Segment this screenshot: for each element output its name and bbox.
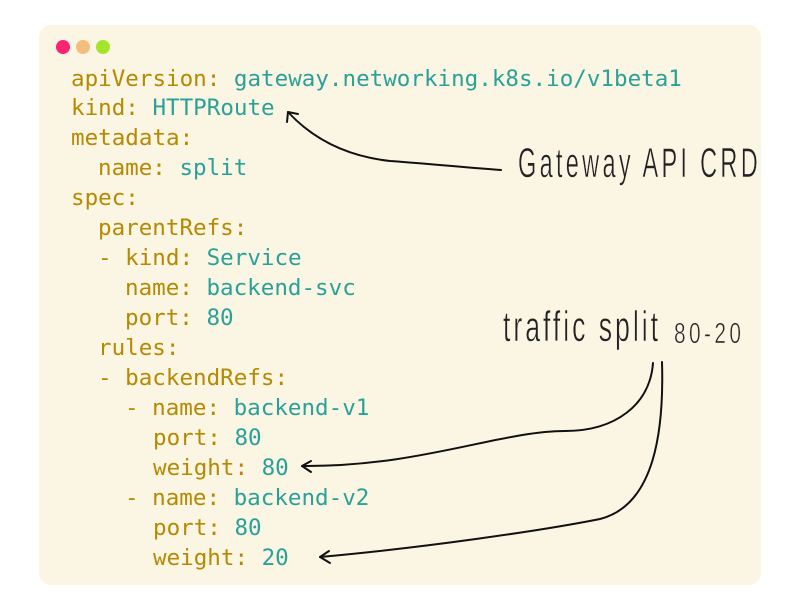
code block: HTTPRoute YAML: spec: [71,185,139,211]
annotation: traffic split 80-20: traffic split [503,303,658,351]
code block: HTTPRoute YAML: rules: [98,335,179,361]
code block: HTTPRoute YAML: port: 80 [125,305,234,331]
code block: HTTPRoute YAML: name: backend-svc [125,275,356,301]
icon: window control dots [56,40,110,54]
code block: HTTPRoute YAML: name: split [98,155,247,181]
arrow: Gateway API CRD to kind [287,112,501,170]
arrow: traffic split to weight 80 [302,363,653,472]
code block: HTTPRoute YAML: - kind: Service [98,245,302,271]
code block: HTTPRoute YAML: - backendRefs: [98,365,288,391]
annotation: traffic split 80-20 [503,303,741,351]
code block: HTTPRoute YAML: kind: HTTPRoute [71,95,275,121]
annotation: traffic split 80-20: 80-20 [674,318,741,350]
code block: HTTPRoute YAML: port: 80 [153,515,262,541]
code block: HTTPRoute YAML: - name: backend-v1 [125,395,369,421]
annotation: Gateway API CRD: Gateway API CRD [518,140,758,187]
code block: HTTPRoute YAML: metadata: [71,125,193,151]
code block: HTTPRoute YAML: port: 80 [153,425,262,451]
code block: HTTPRoute YAML: weight: 80 [153,455,289,481]
code block: HTTPRoute YAML: weight: 20 [153,545,289,571]
code block: HTTPRoute YAML: parentRefs: [98,215,247,241]
code block: HTTPRoute YAML [71,66,682,571]
arrow: traffic split to weight 20 [320,362,662,563]
code block: HTTPRoute YAML: - name: backend-v2 [125,485,369,511]
code block: HTTPRoute YAML: apiVersion: gateway.networking.k8s.io/v1beta1 [71,66,682,92]
